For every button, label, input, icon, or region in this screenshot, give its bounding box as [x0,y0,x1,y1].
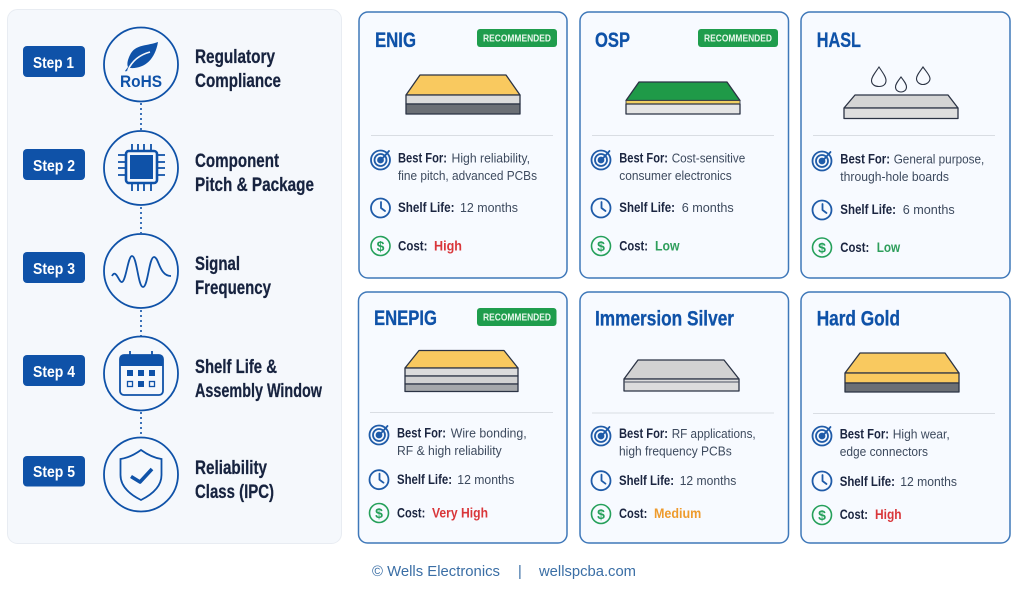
shelf life: 12 months [680,473,737,488]
footer: | [518,564,522,580]
shelf life: Shelf Life: [840,202,896,217]
best for: RF applications, [672,426,756,441]
cost [840,240,901,255]
badge: recommended [477,308,556,326]
icon: target [812,152,832,170]
step 2: Component [195,151,280,172]
icon: dollar: $ [377,238,385,254]
icon: dollar [812,238,832,257]
badge: recommended [477,29,557,47]
cost: Cost: [398,239,428,254]
cost: Low [877,240,901,255]
footer: wellspcba.com [538,564,636,580]
footer [372,564,636,580]
cost: Very High [432,506,488,521]
panel: selection steps [8,10,342,544]
cost: Cost: [619,506,647,521]
best for: Cost-sensitive [672,150,745,166]
connector: steps dotted line [140,103,142,437]
icon: clock [370,470,388,489]
cost [619,239,680,254]
cost [619,506,701,521]
icon: target [371,150,390,170]
best for: Best For: [397,426,446,440]
card: ENEPIG: ENEPIG [374,307,437,330]
icon: target [592,150,610,170]
shelf life [840,474,957,489]
cost: Medium [654,506,701,521]
icon: dollar [592,236,610,256]
icon: clock [592,198,610,218]
best for: High reliability, [452,150,530,166]
step 2 [23,131,314,205]
shelf life: 12 months [457,472,515,487]
cost [397,506,488,521]
shelf life: 12 months [900,474,957,489]
shelf life: 6 months [682,200,734,215]
step 4: Shelf Life & [195,357,277,378]
best for [398,150,537,183]
best for [619,426,756,458]
card: OSP: OSP [595,29,630,52]
cost: High [875,507,902,522]
card: HASL [801,12,1010,278]
icon: dollar: $ [375,505,383,521]
card: Hard Gold [801,292,1010,543]
card: HASL: HASL [817,29,861,52]
card: Immersion Silver: Immersion Silver [595,308,734,330]
best for: fine pitch, advanced PCBs [398,168,537,183]
icon: dollar: $ [818,507,826,523]
icon: dollar [592,504,610,524]
shelf life: Shelf Life: [619,200,675,215]
icon: clock [371,198,390,218]
cost: Cost: [397,506,425,521]
shelf life: Shelf Life: [840,474,895,489]
step 3: Step 3 [33,261,75,278]
cost: Cost: [840,240,869,255]
best for: Best For: [840,426,889,442]
icon: dollar: $ [818,240,826,256]
cost: Low [655,239,680,254]
step 5: Step 5 [33,464,75,481]
step 4 [23,336,322,410]
shelf life: Shelf Life: [619,473,674,488]
card: OSP [580,12,788,278]
shelf life [398,200,518,215]
best for: edge connectors [840,444,928,459]
card: ENEPIG [358,292,567,543]
footer: © Wells Electronics [372,564,500,580]
step 4: Assembly Window [195,381,322,402]
step 3: Signal [195,254,240,275]
icon: dollar [371,236,390,256]
step 2: Pitch & Package [195,175,314,196]
card: ENIG [359,12,567,278]
best for: General purpose, [894,152,984,166]
best for [840,152,984,184]
best for: through-hole boards [840,169,949,184]
cost [398,239,462,254]
shelf life [619,200,734,215]
card: ENIG: ENIG [375,29,416,52]
cost [840,507,902,522]
shelf life: 6 months [903,202,955,217]
step 5: Class (IPC) [195,482,274,503]
step 4: Step 4 [33,364,75,381]
best for [619,150,745,183]
badge: recommended: RECOMMENDED [483,34,551,44]
icon: dollar: $ [597,506,605,522]
board: OSP layers [626,82,740,114]
board: hard gold layers [845,353,959,392]
shelf life: Shelf Life: [398,200,454,215]
best for: Best For: [398,150,447,166]
icon: target [812,426,832,446]
shelf life [840,202,955,217]
icon: dollar [370,504,388,522]
shelf life [397,472,515,487]
board: ENIG layers [406,75,520,114]
icon: clock [592,471,610,490]
card: Hard Gold: Hard Gold [817,308,900,330]
best for: Best For: [619,426,668,441]
best for: Wire bonding, [451,426,527,440]
cost: High [434,239,462,254]
best for: RF & high reliability [397,443,502,458]
icon: dollar [812,506,832,524]
card: Immersion Silver [580,292,788,543]
icon: clock [812,472,832,490]
step 1: RoHS [120,72,162,91]
step 3 [23,234,271,308]
shelf life [619,473,737,488]
cost: Cost: [840,507,868,522]
best for: consumer electronics [619,168,732,183]
best for [397,426,527,458]
best for: High wear, [893,426,950,442]
best for: high frequency PCBs [619,444,732,458]
step 1: Regulatory [195,47,275,68]
icon: clock [812,200,832,220]
step 5 [23,438,274,512]
board: HASL with solder drops [844,67,958,118]
board: ENEPIG layers [405,350,518,392]
shelf life: 12 months [460,200,518,215]
icon: dollar: $ [597,238,605,254]
step 3: Frequency [195,278,271,299]
badge: recommended: RECOMMENDED [704,34,772,44]
step 1: Step 1 [33,55,74,72]
badge: recommended: RECOMMENDED [483,312,551,324]
step 2: Step 2 [33,158,75,175]
best for [840,426,950,459]
board: immersion silver layers [624,360,739,391]
icon: target [592,426,610,446]
best for: Best For: [840,152,890,166]
icon: target [370,426,388,444]
cost: Cost: [619,239,648,254]
step 5: Reliability [195,458,267,479]
step 1 [23,28,281,102]
best for: Best For: [619,150,668,166]
badge: recommended [698,29,778,47]
step 1: Compliance [195,71,281,92]
shelf life: Shelf Life: [397,472,452,487]
